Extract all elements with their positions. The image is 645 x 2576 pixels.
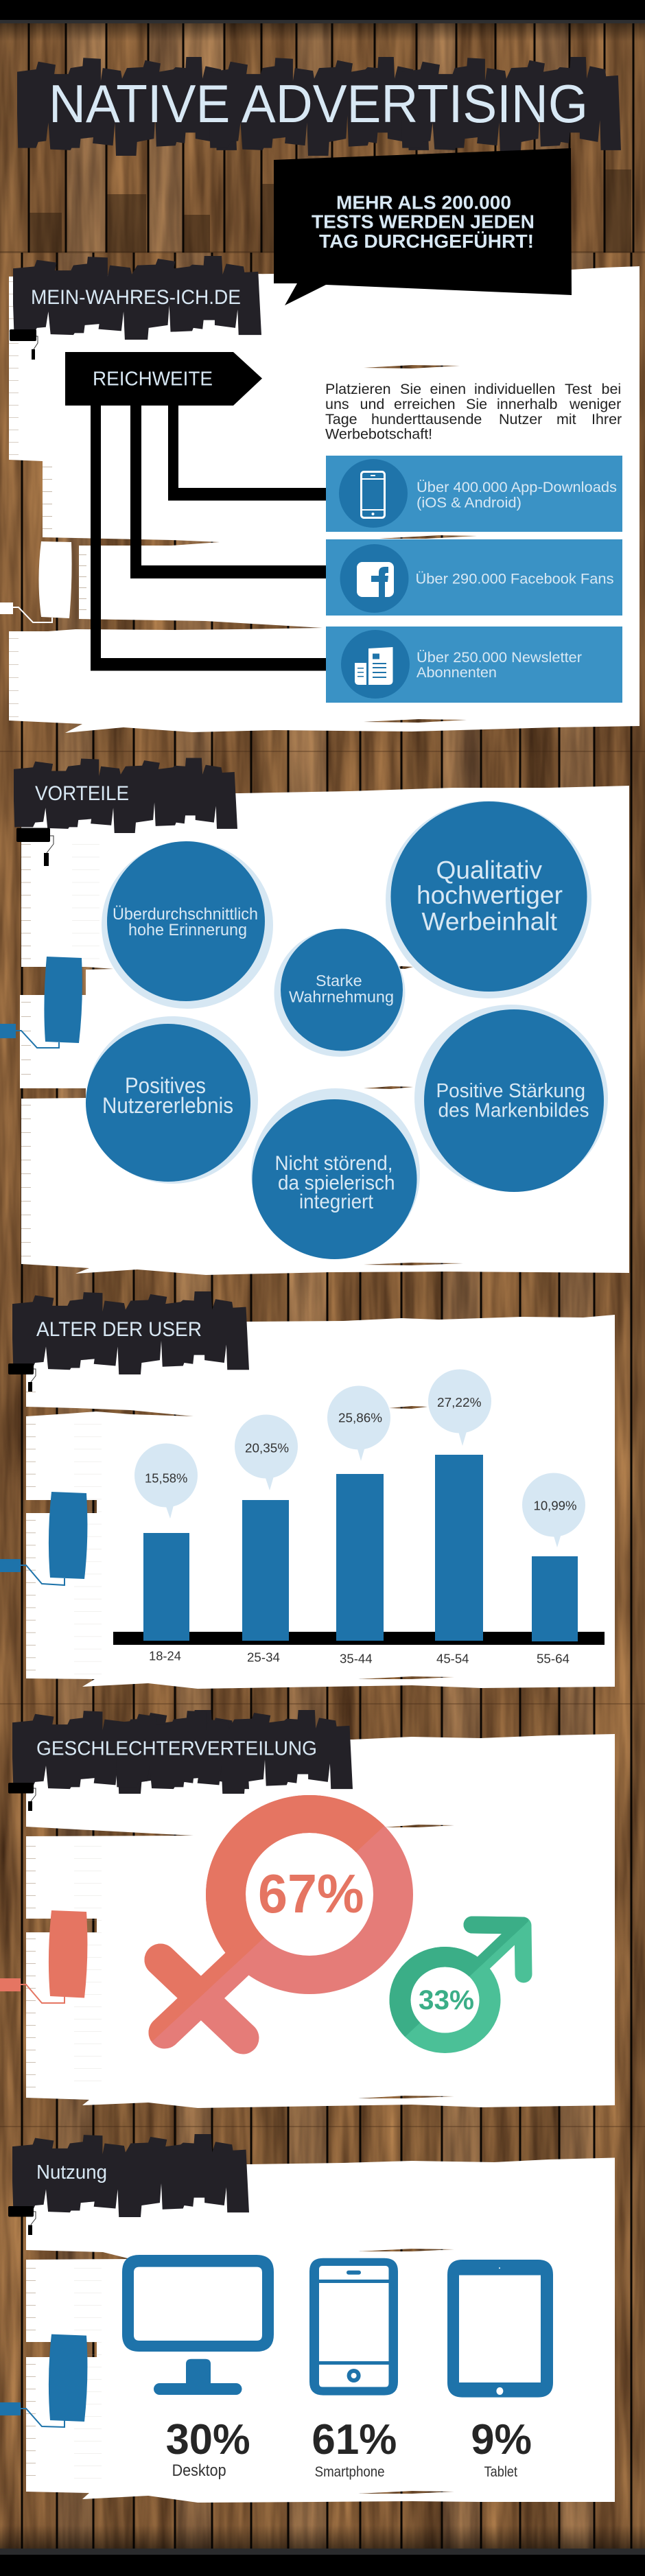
female percentage: 67% (258, 1863, 364, 1924)
bubble: starke wahrnehmung: Wahrnehmung (289, 988, 394, 1006)
icon: tablet (447, 2260, 553, 2398)
bar 45-54: 27,22% (437, 1395, 482, 1409)
stat: smartphone: 61% (312, 2416, 397, 2463)
bar 55-64 (522, 1473, 585, 1665)
text block: reichweite intro: Ihrer (591, 411, 622, 428)
bar 35-44: 25,86% (338, 1411, 382, 1425)
text block: reichweite intro: bei (601, 381, 621, 397)
bar 35-44: 35-44 (340, 1651, 373, 1665)
text block: reichweite intro: innerhalb (497, 396, 557, 412)
icon: blue paint roller 1 (0, 957, 82, 1048)
heading: alter der user (12, 1291, 249, 1374)
text block: reichweite intro: Test (565, 381, 591, 397)
bubble: nicht stoerend: integriert (299, 1191, 374, 1213)
stat: tablet: Tablet (484, 2464, 517, 2480)
panel: alter paper (26, 1315, 615, 1689)
card: app downloads (326, 456, 622, 532)
bubble: ueberdurchschnittlich: Überdurchschnittlich (113, 905, 258, 924)
icon: desktop monitor (122, 2255, 274, 2395)
icon: blue paint roller 3 (0, 2334, 87, 2427)
bubble text: TAG DURCHGEFÜHRT! (319, 231, 534, 252)
panel: nutzung paper (26, 2157, 615, 2503)
text block: reichweite intro: hunderttausende (371, 411, 482, 428)
bar 25-34 (235, 1415, 298, 1665)
text block: reichweite intro: mit (556, 411, 576, 428)
bar 55-64: 10,99% (534, 1499, 576, 1513)
title banner (17, 57, 621, 156)
bubble: nicht stoerend: da spielerisch (278, 1172, 395, 1195)
heading: mein-wahres-ich.de (13, 256, 261, 340)
text block: reichweite intro (325, 381, 622, 443)
icon: small black roller 4 (8, 1783, 36, 1811)
bottom bar (0, 2549, 645, 2576)
text block: reichweite intro: einen (430, 381, 466, 397)
panel: geschlecht paper (26, 1734, 615, 2108)
heading: vorteile: VORTEILE (35, 782, 129, 805)
title: NATIVE ADVERTISING (49, 73, 588, 134)
heading: alter der user: ALTER DER USER (36, 1318, 202, 1341)
text block: reichweite intro: uns (325, 396, 349, 412)
bubble: qualitativ hochwertiger werbeinhalt: Qualitativ (436, 856, 542, 884)
bubble: qualitativ hochwertiger werbeinhalt: Werbeinhalt (421, 907, 558, 936)
icon: small black roller 5 (8, 2206, 36, 2235)
panel: vorteile paper (20, 786, 629, 1275)
bar 18-24: 15,58% (145, 1471, 187, 1485)
heading: vorteile (14, 758, 237, 833)
icon: small black roller 3 (8, 1363, 36, 1392)
card: app downloads: (iOS & Android) (417, 494, 521, 511)
bubble: nicht stoerend (251, 1088, 420, 1259)
bubble: starke wahrnehmung (274, 929, 405, 1057)
icon: smartphone (309, 2258, 398, 2396)
stat: desktop: 30% (166, 2416, 250, 2463)
heading: geschlechterverteilung: GESCHLECHTERVERTEILUNG (36, 1737, 317, 1759)
bar 25-34: 20,35% (245, 1441, 289, 1455)
bar 55-64: 55-64 (537, 1651, 570, 1665)
text block: reichweite intro: Sie (400, 381, 421, 397)
bubble: positive staerkung: Positive Stärkung (436, 1080, 585, 1102)
text block: reichweite intro: Platzieren (325, 381, 391, 397)
text block: reichweite intro: Sie (466, 396, 487, 412)
heading: nutzung: Nutzung (36, 2162, 107, 2183)
arrow: reichweite (65, 352, 262, 406)
bubble text: MEHR ALS 200.000 (336, 192, 511, 213)
text block: reichweite intro: und (360, 396, 384, 412)
bubble: positives nutzererlebnis: Positives (125, 1073, 206, 1098)
card: newsletter: Abonnenten (417, 664, 497, 681)
bubble: qualitativ hochwertiger werbeinhalt: hochwertiger (417, 881, 563, 909)
text block: reichweite intro: Nutzer (499, 411, 542, 428)
male percentage: 33% (419, 1985, 474, 2015)
bubble text: TESTS WERDEN JEDEN (312, 211, 535, 232)
text block: reichweite intro: erreichen (394, 396, 456, 412)
bubble: starke wahrnehmung: Starke (316, 972, 362, 990)
card: newsletter (326, 627, 622, 703)
card: facebook fans (326, 539, 622, 616)
icon: blue paint roller 2 (0, 1492, 87, 1585)
heading: nutzung (12, 2134, 249, 2217)
bar 18-24 (134, 1444, 198, 1663)
panel: mein-wahres-ich paper (9, 266, 640, 733)
bar 35-44 (327, 1386, 390, 1665)
card: app downloads: Über 400.000 App-Downloads (417, 479, 617, 495)
bubble: ueberdurchschnittlich: hohe Erinnerung (128, 921, 247, 939)
bubble: positives nutzererlebnis: Nutzererlebnis (102, 1093, 233, 1118)
bar chart: age (113, 1370, 605, 1665)
bubble: nicht stoerend: Nicht störend, (274, 1152, 392, 1175)
heading: geschlechterverteilung (12, 1710, 353, 1794)
icon: male symbol (390, 1923, 525, 2053)
icon: smartphone (361, 472, 385, 517)
card: newsletter: Über 250.000 Newsletter (417, 649, 582, 666)
icon: small black roller 1 (10, 329, 38, 360)
bubble: ueberdurchschnittlich (102, 841, 273, 1009)
arrow: reichweite: REICHWEITE (93, 368, 213, 390)
speech bubble (274, 148, 572, 305)
bar 45-54 (428, 1370, 491, 1665)
bar 18-24: 18-24 (149, 1649, 181, 1663)
card: facebook fans: Über 290.000 Facebook Fans (416, 571, 613, 587)
bubble: qualitativ hochwertiger werbeinhalt (386, 801, 591, 998)
heading: mein-wahres-ich.de: MEIN-WAHRES-ICH.DE (31, 286, 241, 309)
text block: reichweite intro: weniger (569, 396, 621, 412)
bubble: positives nutzererlebnis (86, 1016, 258, 1184)
text block: reichweite intro: Tage (325, 411, 357, 428)
text block: reichweite intro: individuellen (474, 381, 555, 397)
stat: tablet: 9% (471, 2416, 532, 2463)
stat: desktop: Desktop (172, 2461, 226, 2480)
top bar (0, 0, 645, 23)
bubble: positive staerkung (414, 1005, 608, 1192)
icon: facebook (357, 562, 394, 597)
icon: female symbol (161, 1795, 413, 2038)
stat: smartphone: Smartphone (315, 2464, 385, 2480)
icon: small black roller 2 (16, 828, 54, 866)
icon: white paint roller (0, 541, 72, 622)
icon: newspaper (355, 647, 392, 685)
bar 25-34: 25-34 (247, 1650, 280, 1665)
bubble text (312, 192, 535, 252)
reichweite connector lines (91, 406, 326, 671)
icon: coral paint roller (0, 1910, 87, 2003)
bar 45-54: 45-54 (436, 1651, 469, 1665)
bubble: positive staerkung: des Markenbildes (438, 1099, 589, 1121)
text block: reichweite intro: Werbebotschaft! (325, 426, 432, 443)
